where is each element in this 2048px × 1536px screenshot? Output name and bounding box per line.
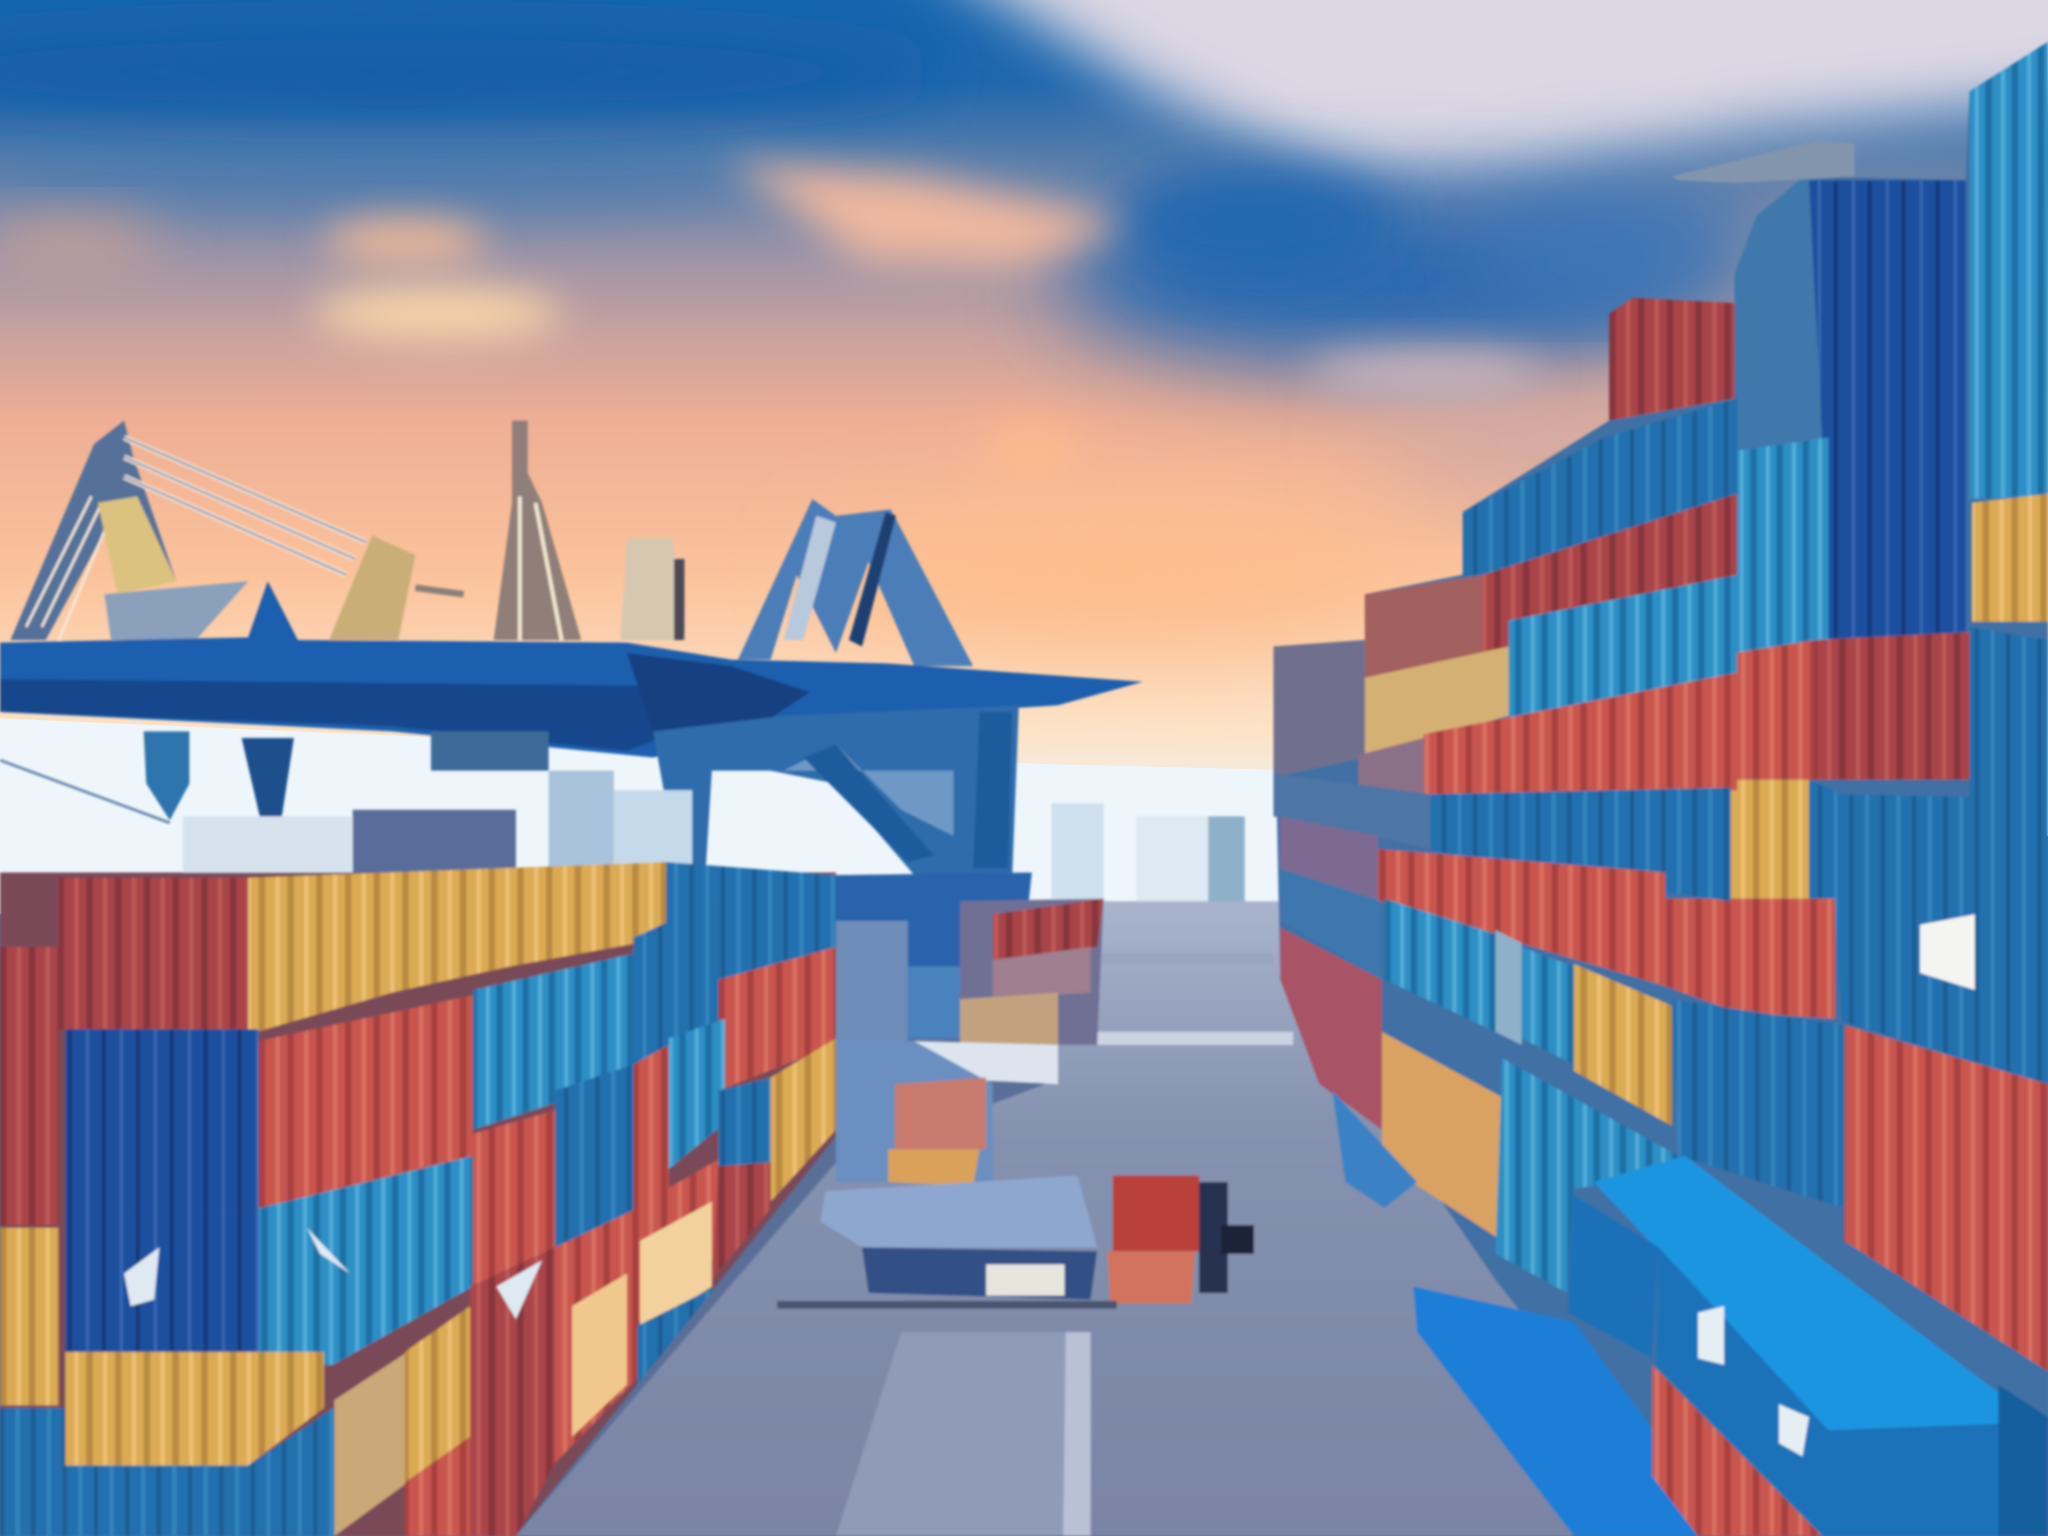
distant port buildings — [183, 803, 1245, 910]
central crane A-frame — [620, 499, 973, 666]
crane lower legs and bracing — [431, 705, 1019, 875]
rear left containers near road — [836, 872, 1104, 1084]
right container stack far column — [1829, 42, 2048, 1371]
left gantry crane with yellow machinery — [10, 421, 581, 640]
background haze behind the crane — [0, 718, 1306, 914]
right container stack tall middle column — [1665, 141, 1970, 1019]
foreground bright blue containers — [1413, 1156, 2048, 1536]
crane blue deck boom — [0, 581, 1143, 823]
right container stack receding rows — [1273, 298, 1844, 1293]
truck in the road — [777, 1176, 1254, 1309]
right container stack backing — [1273, 42, 2048, 1536]
clouds — [0, 0, 2048, 640]
left container stack — [0, 862, 836, 1536]
sky background — [0, 0, 2048, 836]
distant parked containers — [836, 1038, 993, 1186]
road — [516, 901, 1724, 1536]
